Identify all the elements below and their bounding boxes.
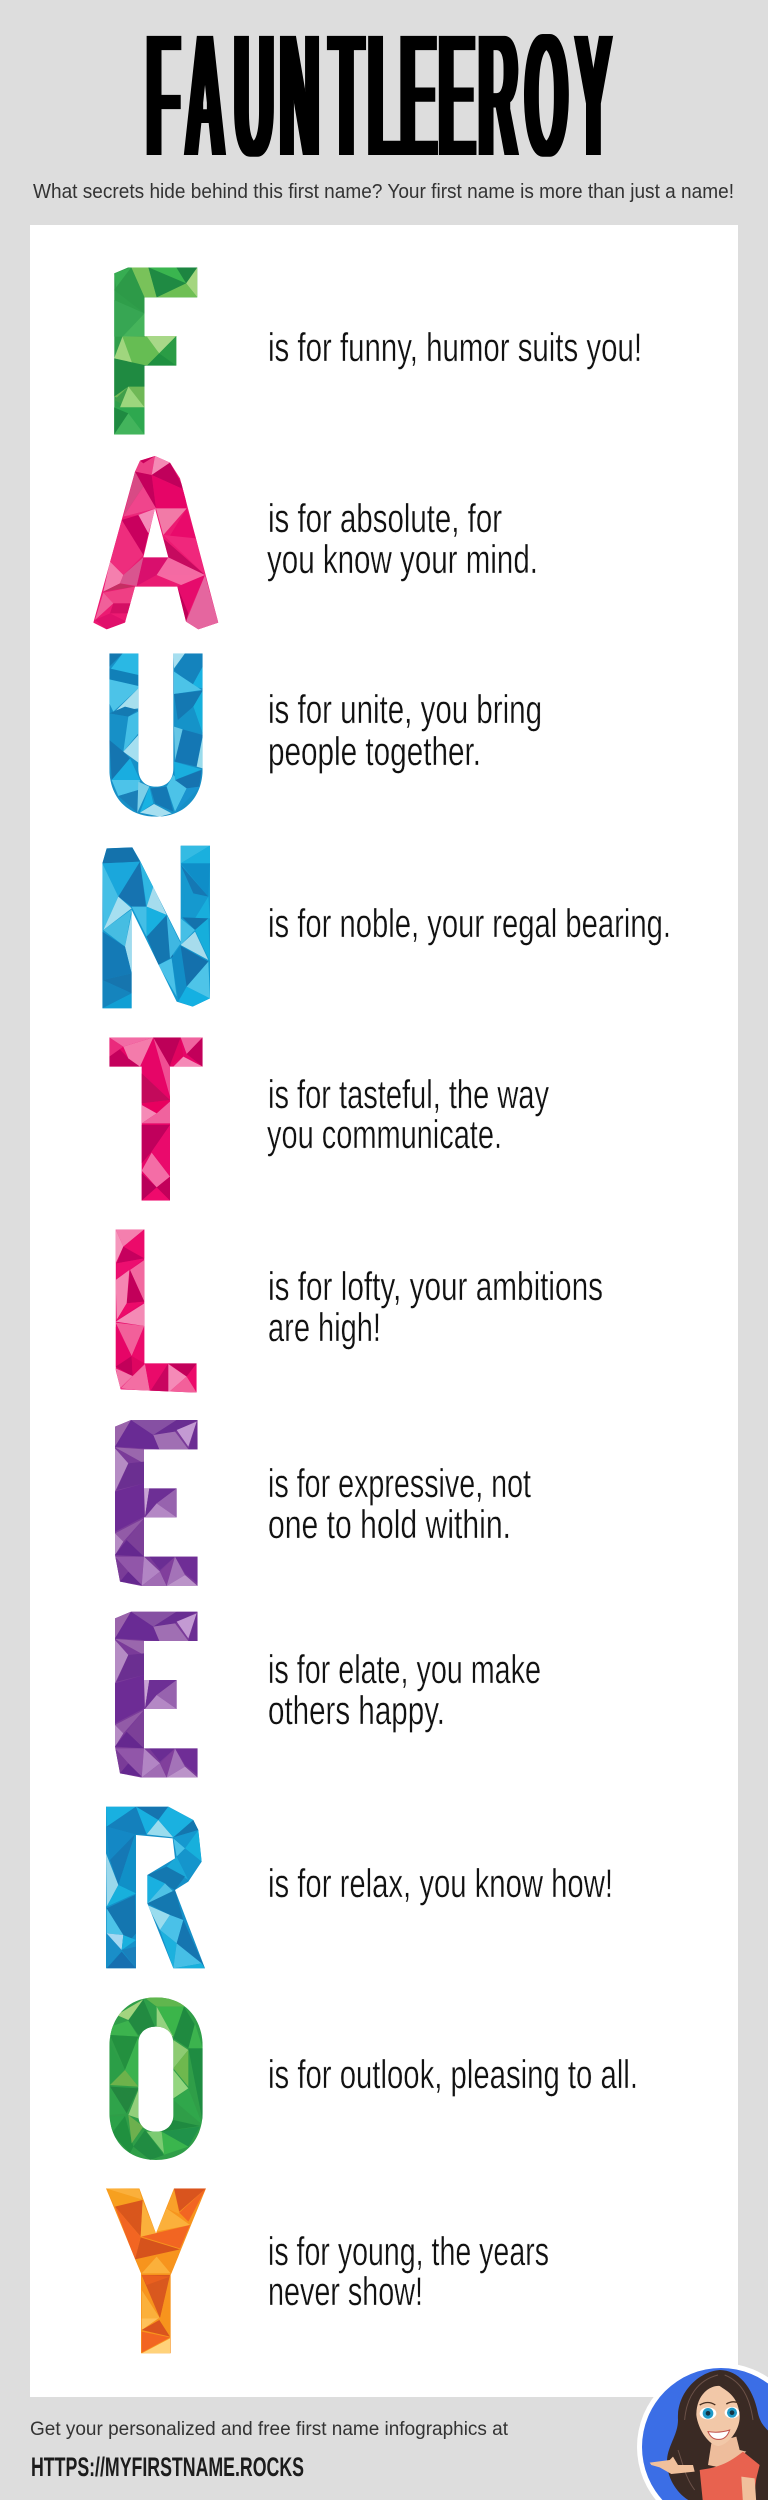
text: A lines: you know your mind. <box>267 538 538 582</box>
icon: polygon letter A <box>90 453 220 630</box>
row: E second <box>113 1610 541 1778</box>
text: L lines: is for lofty, your ambitions <box>268 1265 603 1309</box>
icon: polygon letter Y <box>103 2187 208 2355</box>
title: FAUNTLEEROY <box>146 0 612 197</box>
text: R line: is for relax, you know how! <box>268 1862 613 1906</box>
text: E lines <box>268 1462 531 1547</box>
text: T lines: you communicate. <box>267 1113 502 1157</box>
row: N <box>100 843 671 1010</box>
footer text: url: HTTPS://MYFIRSTNAME.ROCKS <box>31 2452 304 2482</box>
text: L lines <box>268 1265 603 1350</box>
row: Y <box>103 2187 549 2355</box>
icon: polygon letter O <box>107 1995 205 2162</box>
text: U lines: is for unite, you bring <box>268 688 542 732</box>
text: A lines: is for absolute, for <box>268 497 502 541</box>
text: A lines <box>267 497 538 582</box>
text: E second lines: is for elate, you make <box>268 1648 541 1692</box>
icon: polygon letter R <box>103 1804 207 1970</box>
text: U lines: people together. <box>268 730 481 774</box>
row: E <box>113 1418 531 1587</box>
icon: polygon letter N <box>100 843 212 1010</box>
text: L lines: are high! <box>268 1306 381 1350</box>
text: F line: is for funny, humor suits you! <box>268 326 642 370</box>
row: F <box>114 267 642 435</box>
text: T lines: is for tasteful, the way <box>268 1073 549 1117</box>
icon: polygon letter T <box>107 1035 205 1203</box>
row: L <box>113 1227 603 1395</box>
subtitle: What secrets hide behind this first name? Your first name is more than just a name! <box>33 180 734 203</box>
text: E second lines <box>268 1648 541 1733</box>
row: T <box>107 1035 549 1203</box>
row: O <box>107 1995 638 2162</box>
icon: polygon letter L <box>113 1227 198 1395</box>
text: Y lines: never show! <box>268 2270 423 2314</box>
row: R <box>103 1804 613 1970</box>
row: U <box>107 650 542 818</box>
footer text: call to action: Get your personalized and free first name infographics at <box>30 2418 509 2440</box>
icon: polygon letter E second <box>113 1610 199 1778</box>
text: T lines <box>267 1073 549 1157</box>
icon: polygon letter F <box>114 267 197 435</box>
text: Y lines: is for young, the years <box>268 2230 549 2274</box>
text: E lines: is for expressive, not <box>268 1462 531 1506</box>
text: U lines <box>268 688 542 774</box>
text: E second lines: others happy. <box>268 1689 445 1733</box>
text: O line: is for outlook, pleasing to all. <box>268 2053 638 2097</box>
row: A <box>90 453 538 630</box>
icon: polygon letter E <box>113 1418 199 1587</box>
icon: avatar woman in circle <box>637 2363 768 2500</box>
icon: polygon letter U <box>107 650 205 818</box>
text: Y lines <box>268 2230 549 2314</box>
text: E lines: one to hold within. <box>268 1503 511 1547</box>
